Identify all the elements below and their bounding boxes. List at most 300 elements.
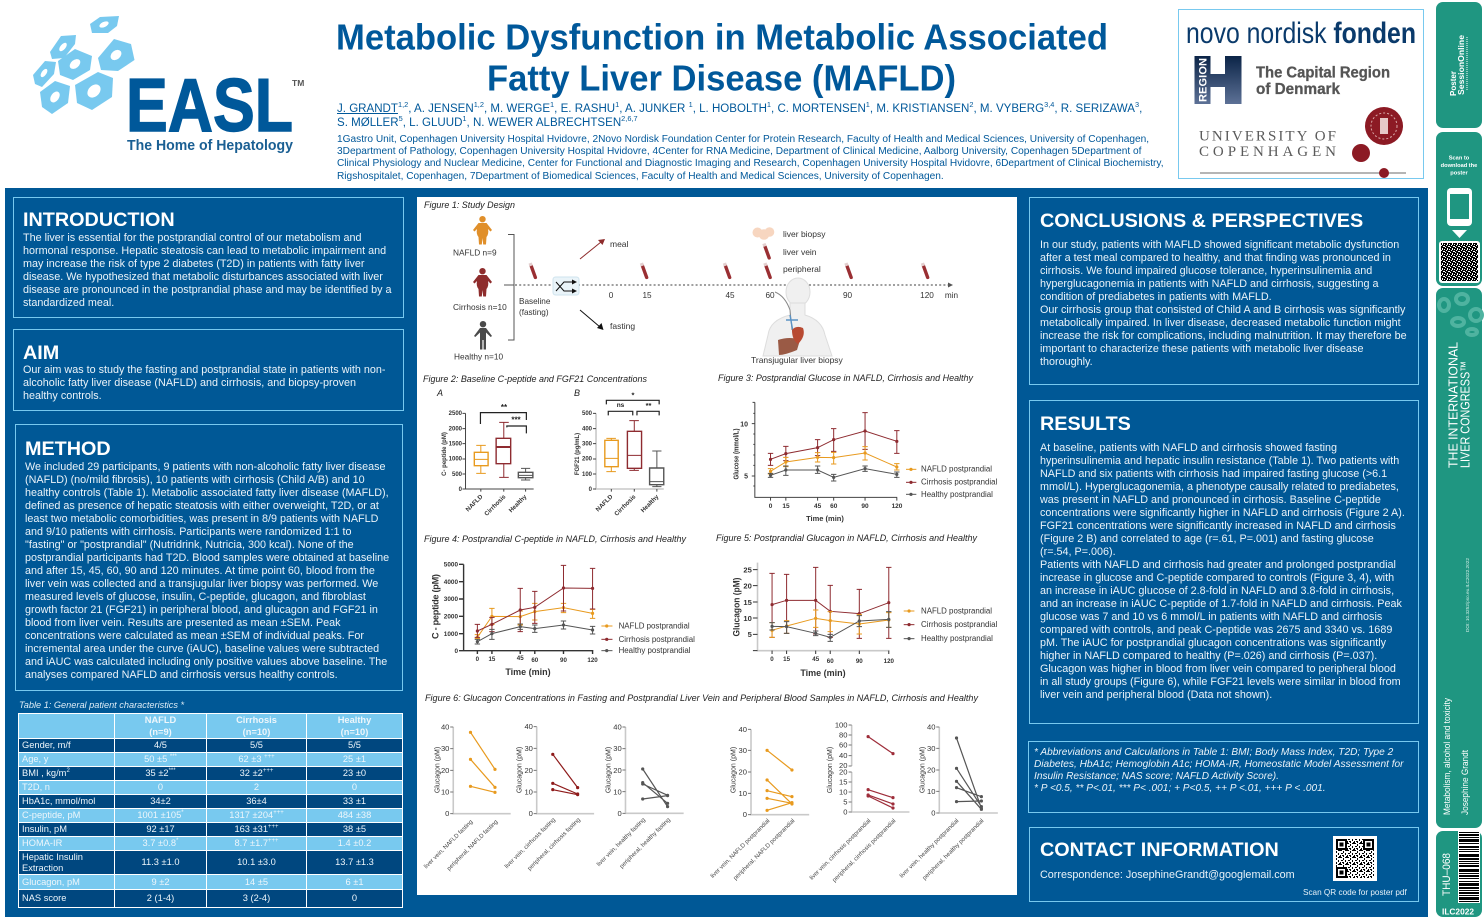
- paired plot: cirrhosis fasting: [504, 722, 594, 872]
- logo: capital region text: The Capital Region: [1256, 64, 1390, 82]
- sample labels: liver vein: [783, 247, 817, 257]
- text: session and author: [1442, 698, 1470, 815]
- text: results body: Patients with NAFLD and cirrhosis had greater and prolonged postprandial: [1040, 559, 1396, 571]
- biopsy label: Transjugular liver biopsy: [751, 355, 844, 365]
- text: method body: measured levels of glucose, insulin, C-peptide, glucagon, and fibroblast: [25, 591, 366, 603]
- paired plot: cirrhosis postprandial: 10: [839, 788, 848, 796]
- text: method body: concentrations were calculated as mean ±SEM of individual peaks. For: [25, 630, 364, 642]
- paired plot: NAFLD postprandial: 20: [739, 768, 747, 776]
- sample labels: liver biopsy: [783, 229, 826, 239]
- figure 4 axis labels: Time (min): [505, 667, 551, 677]
- panel: introduction: [13, 197, 404, 318]
- figure 3: glucose line chart: [718, 373, 998, 523]
- authors: [337, 100, 1142, 129]
- figure 3 axis labels: Glucose (mmol/L): [732, 428, 740, 480]
- paired plot: cirrhosis fasting: 10: [524, 788, 533, 796]
- figure 4 axis labels: 120: [587, 657, 598, 664]
- text: introduction body: The liver is essential for the postprandial control of our metabolism and: [23, 232, 361, 244]
- boxplot B: [575, 390, 664, 518]
- text: introduction body: [23, 232, 392, 309]
- paired plot: healthy postprandial: 40: [927, 722, 936, 732]
- paired plot: cirrhosis postprandial: 15: [839, 778, 848, 786]
- text: abbreviations: Diabetes, HbA1c; Hemoglobin A1c; HOMA-IR, Homeostatic Model Assessment for: [1034, 759, 1404, 770]
- figure 1 title: Figure 1: Study Design: [424, 200, 515, 210]
- text: results body: pM. The iAUC for postprandial glucagon concentrations was significantly: [1040, 637, 1386, 649]
- text: results body: compared with controls, and peak C-peptide was 2675 and 3340 vs. 1689: [1040, 624, 1392, 636]
- table: patient characteristics: 32 ±2+++: [240, 768, 273, 778]
- paired plot: healthy postprandial: Glucagon (pM): [920, 747, 926, 793]
- authors: J. GRANDT1,2, A. JENSEN1,2, M. WERGE1, E. RASHU1, A. JUNKER 1, L. HOBOLTH1, C. MORTENSEN1, M. KRISTIANSEN2, M. VYBERG3,4, R. SERIZAWA3,: [337, 100, 1142, 115]
- icon: NAFLD person: [473, 216, 492, 244]
- arrow: meal: [580, 239, 605, 259]
- heading: conclusions: CONCLUSIONS & PERSPECTIVES: [1040, 210, 1363, 232]
- panel: method: [15, 424, 403, 691]
- paired plot: healthy postprandial: peripheral, healthy postprandial: [922, 818, 985, 882]
- paired plot: NAFLD postprandial: Glucagon (pM): [730, 747, 738, 793]
- paired plot: healthy postprandial: 0: [931, 808, 936, 818]
- figure 4 axis labels: 0: [476, 656, 480, 663]
- table: patient characteristics: Extraction: [22, 862, 63, 872]
- boxplot A: C- peptide (pM): [442, 432, 448, 476]
- text: abbreviations: * P <0.5, ** P<.01, *** P< .001; + P<0.5, ++ P <.01, +++ P < .001.: [1034, 783, 1326, 794]
- boxplot B: 300: [582, 442, 593, 448]
- paired plot: cirrhosis postprandial: 40: [839, 751, 848, 760]
- text: results body: liver vein and peripheral blood (Data not shown).: [1040, 689, 1272, 701]
- paired plot: NAFLD fasting: 40: [441, 722, 449, 732]
- group labels: Healthy n=10: [454, 352, 504, 362]
- text: conclusions body: thoroughly.: [1040, 356, 1093, 368]
- paired plot: NAFLD fasting: Glucagon (pM): [434, 747, 442, 793]
- logo: university of copenhagen: UNIVERSITY OF: [1199, 128, 1336, 144]
- text: session and author: Metabolism, alcohol and toxicity: [1442, 698, 1452, 815]
- paired plot: cirrhosis postprandial: 0: [843, 808, 848, 816]
- icon: blood tubes: [529, 243, 930, 280]
- text: scan to download: poster: [1450, 170, 1468, 176]
- table: patient characteristics: [18, 713, 403, 908]
- table: patient characteristics: 33 ±1: [343, 796, 366, 806]
- text: method body: analyses compared NAFLD and cirrhosis versus healthy controls.: [25, 669, 338, 681]
- paired plot: healthy postprandial: 20: [927, 766, 936, 774]
- paired plot: cirrhosis postprandial: 20: [839, 768, 848, 776]
- text: conclusions body: after a test meal compared to healthy, and that finding was pronounced in: [1040, 252, 1391, 264]
- figure 3 axis labels: 45: [814, 503, 822, 510]
- boxplot B: Healthy: [640, 493, 661, 514]
- table: patient characteristics: 5/5: [250, 740, 263, 750]
- text: results body: an increase in iAUC glucose of 2.8-fold in NAFLD and 3.8-fold in cirrhosis,: [1040, 585, 1394, 597]
- icon: healthy person: [474, 321, 492, 350]
- boxplot A: 2500: [449, 411, 463, 417]
- figure 5 axis labels: Time (min): [800, 668, 846, 678]
- figure 4 axis labels: 3000: [444, 596, 458, 603]
- figure 5 legend: Cirrhosis postprandial: [921, 620, 998, 629]
- figure 5 legend: NAFLD postprandial: [921, 606, 992, 616]
- table: patient characteristics: (n=9): [149, 727, 172, 737]
- figure 3 legend: Healthy postprandial: [921, 490, 993, 499]
- paired plot: cirrhosis postprandial: 5: [843, 798, 848, 806]
- paired plot: healthy fasting: 0: [617, 809, 622, 818]
- figure 4 axis labels: 1000: [444, 631, 458, 638]
- figure 3 axis labels: 10: [740, 422, 748, 428]
- boxplot B: 0: [589, 487, 593, 493]
- text: method body: (NAFLD) (no/mild fibrosis), 10 patients with cirrhosis (Child A/B) and 10: [25, 474, 365, 486]
- text: conclusions body: increase the risk for complications, including malnutrition. It may therefore be: [1040, 330, 1407, 342]
- figure 2 title: Figure 2: Baseline C-peptide and FGF21 Concentrations: [423, 374, 647, 384]
- paired plot: healthy fasting: [596, 722, 684, 870]
- boxplot A: [442, 403, 534, 518]
- figure 3 title: Figure 3: Postprandial Glucose in NAFLD, Cirrhosis and Healthy: [718, 373, 974, 383]
- text: congress name: THE INTERNATIONAL: [1446, 342, 1460, 468]
- paired plot: cirrhosis fasting: 40: [524, 722, 533, 731]
- paired plot: healthy fasting: 40: [613, 722, 622, 732]
- panel: aim: [13, 329, 404, 411]
- figure 5 axis labels: 90: [856, 658, 863, 665]
- table: patient characteristics: 0: [352, 893, 357, 903]
- QR code: [1439, 241, 1480, 283]
- text: method body: postprandial participants had T2D. Blood samples were obtained at baseline: [25, 552, 389, 564]
- table: patient characteristics: T2D, n: [22, 782, 50, 792]
- logo: university of copenhagen: COPENHAGEN: [1199, 144, 1336, 160]
- table: patient characteristics: 0: [352, 782, 357, 792]
- figure 3 legend: [921, 464, 998, 499]
- figure 4 title: Figure 4: Postprandial C-peptide in NAFLD, Cirrhosis and Healthy: [424, 534, 687, 544]
- table: patient characteristics: 36±4: [246, 796, 267, 806]
- logo: capital region text: of Denmark: [1256, 81, 1340, 98]
- table: patient characteristics: Cirrhosis: [236, 715, 277, 725]
- table: patient characteristics: 9 ±2: [151, 876, 170, 886]
- sidebar segment: poster id: [1436, 831, 1482, 917]
- table: patient characteristics: 38 ±5: [343, 824, 366, 834]
- table: patient characteristics: 1317 ±204+++: [229, 810, 284, 820]
- heading: results: RESULTS: [1040, 413, 1131, 435]
- text: introduction body: disease. We hypothesized that metabolic disturbances associated with liver: [23, 271, 383, 283]
- text: conclusions body: cirrhosis. We found impaired glucose tolerance, hyperinsulinemia and: [1040, 265, 1372, 277]
- sidebar segment: scan to download: [1436, 132, 1482, 286]
- title: Metabolic Dysfunction in Metabolic Associated: [336, 16, 1108, 58]
- paired plot: NAFLD fasting: 20: [441, 766, 449, 775]
- figure 4 axis labels: 90: [560, 657, 567, 664]
- figure 5 plot: [753, 563, 914, 654]
- table: patient characteristics: BMI , kg/m2: [22, 768, 70, 778]
- text: results body: increase in glucose and C-peptide compared to controls (Figure 3, 4), with: [1040, 572, 1394, 584]
- baseline label: Baseline: [519, 297, 551, 306]
- table: patient characteristics: HbA1c, mmol/mol: [22, 796, 95, 806]
- boxplot A: NAFLD: [465, 493, 485, 513]
- time labels: 45: [725, 291, 735, 300]
- paired plot: NAFLD fasting: 10: [441, 788, 449, 796]
- table: patient characteristics: 50 ±5 ***: [144, 754, 177, 764]
- figure 1: study design: [424, 200, 959, 365]
- decorative hexagons: [1439, 294, 1482, 335]
- figure 3 axis labels: Time (min): [806, 514, 844, 523]
- table: patient characteristics: 35 ±2***: [145, 768, 176, 778]
- panel: abbreviations: [1028, 740, 1419, 812]
- table: patient characteristics: 11.3 ±1.0: [141, 857, 180, 867]
- text: method body: and 9/10 patients with cirrhosis. Participants were randomized 1:1 to: [25, 526, 351, 538]
- figure 5 axis labels: 5: [748, 630, 753, 639]
- text: results body: hyperinsulinemia and hepatic insulin resistance (Table 1). Two patients with: [1040, 455, 1399, 467]
- figure 5 axis labels: 0: [770, 656, 774, 663]
- sidebar: [1436, 2, 1484, 917]
- paired plot: healthy fasting: 20: [613, 766, 622, 775]
- table: patient characteristics: Hepatic Insulin: [22, 852, 83, 862]
- paired plot: NAFLD postprandial: [710, 725, 809, 882]
- group labels: Cirrhosis n=10: [453, 302, 507, 312]
- paired plot: cirrhosis fasting: Glucagon (pM): [516, 747, 524, 793]
- icon: liver biopsy: [752, 227, 774, 240]
- text: congress name: LIVER CONGRESS™: [1458, 361, 1472, 468]
- table: patient characteristics: 6 ±1: [345, 876, 364, 886]
- figure 4 axis labels: [430, 562, 598, 677]
- icon: down triangle: [1452, 230, 1467, 238]
- paired plot: NAFLD fasting: peripheral, NAFLD fasting: [446, 819, 499, 872]
- time labels: 15: [642, 291, 652, 300]
- boxplot B: Cirrhosis: [613, 493, 638, 518]
- text: results body: in all study groups (Figure 6), while FGF21 levels were similar in blood from: [1040, 676, 1401, 688]
- panel: figures: [417, 197, 1017, 895]
- group labels: [453, 248, 507, 362]
- heading: method: METHOD: [25, 438, 111, 460]
- paired plot: cirrhosis fasting: peripheral, cirrhosis fasting: [527, 817, 582, 872]
- figure 3 plot: [752, 402, 916, 501]
- figure 4 legend: Cirrhosis postprandial: [619, 635, 695, 644]
- sidebar segment: poster session online: [1436, 2, 1482, 128]
- time labels: [609, 291, 959, 300]
- boxplot A: 0: [459, 487, 463, 493]
- panel labels: B: [574, 388, 580, 398]
- text: method body: We included 29 participants, 9 patients with non-alcoholic fatty liver disease: [25, 461, 386, 473]
- paired plot: cirrhosis fasting: 20: [524, 766, 533, 775]
- boxplot A: Cirrhosis: [483, 493, 508, 518]
- figure 4 axis labels: 0: [454, 648, 458, 655]
- table: patient characteristics: 1.4 ±0.2: [338, 838, 371, 848]
- poster background panel: [5, 188, 1428, 917]
- logo: capital region text: [1256, 64, 1390, 98]
- figure 4 axis labels: 5000: [444, 562, 458, 568]
- text: method body: healthy controls (Table 1). Metabolic associated fatty liver disease (MAFLD),: [25, 487, 389, 499]
- figure 4 axis labels: 2000: [444, 614, 458, 620]
- figure 2: boxplots: [423, 374, 664, 518]
- boxplot B: 500: [582, 411, 593, 417]
- figure 5 legend: [921, 606, 998, 643]
- logo: region H: [1194, 56, 1242, 104]
- table: patient characteristics: Healthy: [338, 715, 371, 725]
- table: patient characteristics: Glucagon, pM: [22, 876, 80, 886]
- boxplot B: **: [646, 401, 651, 410]
- paired plot: cirrhosis postprandial: peripheral, cirrhosis postprandial: [832, 818, 897, 884]
- paired plot: NAFLD postprandial: peripheral, NAFLD postprandial: [733, 818, 796, 882]
- figure 4 plot: [459, 564, 612, 654]
- time labels: 120: [920, 291, 934, 300]
- text: conclusions body: metabolically impaired. In liver disease, decreased metabolic function might: [1040, 317, 1401, 329]
- paired plot: cirrhosis fasting: liver vein, cirrhosis fasting: [504, 817, 557, 870]
- text: DOI: DOI: 10.3252/pso.eu.ILC2022.2022: [1465, 558, 1470, 632]
- text: poster number: THU–068: [1441, 853, 1453, 896]
- logo: region H: REGION: [1198, 58, 1210, 102]
- paired plot: cirrhosis fasting: 30: [524, 744, 533, 753]
- paired plot: cirrhosis postprandial: 100: [835, 720, 848, 730]
- sidebar segment: poster session online: Poster: [1448, 70, 1458, 96]
- text: abbreviations: * Abbreviations and Calculations in Table 1: BMI; Body Mass Index, T2D; Type 2: [1034, 747, 1393, 758]
- figure 5 axis labels: 15: [743, 598, 753, 607]
- figure 3 axis labels: [732, 422, 903, 523]
- table: patient characteristics: HOMA-IR: [22, 838, 62, 848]
- figure 3 axis labels: 120: [892, 503, 903, 510]
- figure 5 legend: Healthy postprandial: [921, 634, 993, 643]
- figure 4: C-peptide line chart: [424, 534, 695, 677]
- table: patient characteristics: 34±2: [150, 796, 171, 806]
- illustration: torso with heart and liver: [763, 278, 832, 356]
- text: results body: [1040, 442, 1405, 701]
- title: [336, 16, 1108, 98]
- text: aim body: Our aim was to study the fasting and postprandial state in patients with non-: [23, 364, 386, 376]
- text: results body: NAFLD and six patients with cirrhosis had impaired fasting glucose (>6.1: [1040, 468, 1387, 480]
- figure 3 legend: NAFLD postprandial: [921, 464, 992, 474]
- figure 4 axis labels: 60: [531, 657, 539, 664]
- text: abbreviations: [1034, 747, 1404, 794]
- logo: university of copenhagen: [1199, 107, 1406, 178]
- text: results body: FGF21 concentrations were significantly increased in NAFLD and cirrhosis: [1040, 520, 1396, 532]
- table: patient characteristics: C-peptide, pM: [22, 810, 80, 820]
- table: patient characteristics: 484 ±38: [338, 810, 371, 820]
- text: results body: At baseline, patients with NAFLD and cirrhosis showed fasting: [1040, 442, 1337, 454]
- tagline: The Home of Hepatology: [127, 137, 294, 154]
- text: introduction body: disease are pronounced in the postprandial phase and may be identified by a: [23, 284, 392, 296]
- paired plot: cirrhosis postprandial: 80: [839, 730, 848, 740]
- figure 4 legend: NAFLD postprandial: [619, 622, 690, 630]
- text: scan to download: download the: [1441, 163, 1477, 169]
- table: patient characteristics: 8.7 ±1.7+++: [234, 838, 279, 848]
- table: patient characteristics: 23 ±0: [343, 768, 366, 778]
- figure 3 axis labels: 60: [830, 503, 838, 510]
- table: patient characteristics: 10.1 ±3.0: [237, 857, 276, 867]
- table: patient characteristics: 4/5: [154, 740, 167, 750]
- boxplot B: FGF21 (pg/mL): [575, 433, 581, 475]
- boxplot A: 2000: [449, 426, 463, 432]
- paired plot: cirrhosis fasting: 0: [529, 809, 533, 818]
- QR code: [1333, 836, 1377, 881]
- paired plot: healthy postprandial: liver vein, healthy postprandial: [899, 818, 960, 879]
- text: congress name: [1446, 342, 1472, 468]
- baseline label: (fasting): [519, 308, 549, 317]
- table: patient characteristics: Age, y: [22, 754, 48, 764]
- barcode: [1458, 831, 1480, 903]
- panel: conclusions and perspectives: [1029, 197, 1419, 385]
- text: ILC2022: ILC2022: [1442, 906, 1474, 916]
- text: QR caption: Scan QR code for poster pdf: [1303, 888, 1407, 897]
- icon: randomization: [553, 277, 579, 295]
- text: method body: least two metabolic comorbidities, was present in 8/9 patients with NAFLD: [25, 513, 378, 525]
- icon: hexagon cluster: [33, 16, 134, 114]
- table: patient characteristics: (n=10): [341, 727, 368, 737]
- dotted time line: [515, 282, 953, 288]
- boxplot A: 500: [452, 472, 463, 478]
- table: patient characteristics: Gender, m/f: [22, 740, 71, 750]
- text: method body: and after 15, 45, 60, 90 and 120 minutes. At time point 60, blood from the: [25, 565, 375, 577]
- text: scan to download: Scan to: [1449, 156, 1470, 162]
- text: results body: Glucagon was higher in blood from liver vein compared to peripheral blood: [1040, 663, 1396, 675]
- figure 3 legend: Cirrhosis postprandial: [921, 478, 998, 486]
- table: patient characteristics: 62 ±3 +++: [238, 754, 275, 764]
- sidebar segment: congress info: [1436, 288, 1482, 828]
- text: method body: and iAUC was calculated including only positive values above baseline. The: [25, 656, 387, 668]
- table: patient characteristics: NAFLD: [145, 715, 176, 725]
- authors: S. MØLLER5, L. GLUUD1, N. WEWER ALBRECHTSEN2,6,7: [337, 114, 638, 129]
- boxplot B: NAFLD: [595, 493, 615, 513]
- logo: EASL: [33, 16, 304, 154]
- paired plot: healthy postprandial: 10: [927, 787, 936, 796]
- paired plot: healthy fasting: 10: [613, 788, 622, 796]
- time labels: 90: [843, 291, 852, 300]
- text: results body: was present in NAFLD and pronounced in cirrhosis. Baseline C-peptide: [1040, 494, 1381, 506]
- text: method body: defined as presence of hepatic steatosis with either overweight, T2D, or at: [25, 500, 379, 512]
- icon: cirrhosis person: [473, 268, 492, 296]
- table: patient characteristics: 3.7 ±0.8*: [143, 838, 178, 848]
- text: conclusions body: important to characterize these patients with metabolic liver disease: [1040, 343, 1363, 355]
- figure 5 title: Figure 5: Postprandial Glucagon in NAFLD, Cirrhosis and Healthy: [716, 533, 978, 543]
- text: method body: liver vein was collected and a transjugular liver biopsy was performed. We: [25, 578, 378, 590]
- table: patient characteristics: 163 ±31+++: [234, 824, 279, 834]
- affiliations: [337, 134, 1164, 182]
- paired plot: NAFLD postprandial: 30: [739, 746, 747, 755]
- table: patient characteristics: 2 (1-4): [147, 893, 174, 903]
- text: method body: growth factor 21 (FGF21) in peripheral blood, and glucagon and FGF21 in: [25, 604, 378, 616]
- table: patient characteristics: 14 ±5: [245, 876, 268, 886]
- labels: meal, fasting: meal: [610, 239, 629, 249]
- figure 4 legend: Healthy postprandial: [619, 646, 691, 655]
- labels: meal, fasting: fasting: [610, 321, 635, 331]
- text: conclusions body: condition of prediabetes in patients with MAFLD.: [1040, 291, 1272, 303]
- text: conclusions body: hyperglucagonemia in patients with NAFLD and cirrhosis, suggesting a: [1040, 278, 1378, 290]
- bracket: [504, 234, 514, 340]
- affiliations: Rigshospitalet, Copenhagen, 7Department of Biomedical Sciences, Faculty of Health and Medical Sciences, University of Copenhagen.: [337, 171, 944, 182]
- paired plot: healthy fasting: Glucagon (pM): [606, 747, 612, 793]
- panel: results: [1029, 400, 1419, 724]
- text: results body: mmol/L). Hyperglucagonemia, a phenotype causally related to prediabetes,: [1040, 481, 1399, 493]
- figure 5 axis labels: 10: [743, 614, 752, 623]
- boxplot B: 400: [582, 426, 593, 432]
- baseline label: [519, 297, 551, 317]
- text: results body: concentrations were significantly higher in NAFLD and cirrhosis (Figure 2 A).: [1040, 507, 1405, 519]
- paired plot: NAFLD postprandial: 10: [739, 789, 747, 798]
- panel labels: [436, 388, 580, 398]
- paired plot: cirrhosis postprandial: liver vein, cirrhosis postprandial: [809, 818, 872, 882]
- sample labels: peripheral: [783, 264, 821, 274]
- table: patient characteristics: Insulin, pM: [22, 824, 67, 834]
- paired plot: healthy fasting: peripheral, healthy fasting: [619, 817, 672, 870]
- paired plot: NAFLD fasting: liver vein, NAFLD fasting: [423, 819, 474, 870]
- text: aim body: alcoholic fatty liver disease (NAFLD) and cirrhosis, and biopsy-proven: [23, 377, 356, 389]
- paired plot: cirrhosis postprandial: 60: [839, 740, 848, 750]
- table: patient characteristics: (n=10): [243, 727, 270, 737]
- figure 5 axis labels: 45: [812, 656, 820, 663]
- time labels: 60: [765, 291, 775, 300]
- text: method body: "fasting" or "postprandial" (Nutridrink, Nutricia, 300 kcal). None of the: [25, 539, 354, 551]
- table: patient characteristics: NAS score: [22, 893, 66, 903]
- paired plot: cirrhosis postprandial: Glucagon (pM): [827, 747, 834, 793]
- boxplot B: 100: [582, 472, 593, 478]
- figure 5 axis labels: 20: [743, 582, 752, 590]
- figure 5 axis labels: 25: [743, 566, 753, 574]
- sidebar segment: poster session online: SessionOnline: [1457, 34, 1466, 95]
- figure 4 axis labels: 4000: [444, 579, 458, 586]
- paired plot: cirrhosis postprandial: [809, 720, 909, 884]
- boxplot A: 1500: [449, 442, 463, 448]
- table: patient characteristics: 25 ±1: [343, 754, 366, 764]
- figure 5 axis labels: Glucagon (pM): [732, 578, 742, 636]
- table: patient characteristics: 0: [158, 782, 163, 792]
- text: results body: higher in NAFLD compared to healthy (P=.026) and cirrhosis (P=.037).: [1040, 650, 1377, 662]
- paired plot: NAFLD postprandial: 0: [743, 810, 747, 819]
